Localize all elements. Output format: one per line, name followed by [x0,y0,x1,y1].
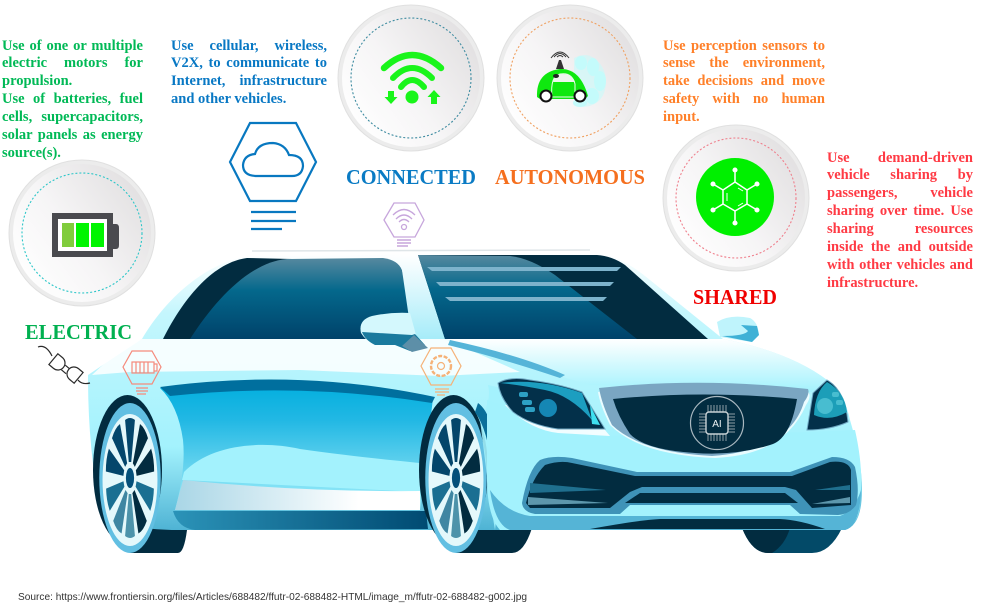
icon: wifi signal [384,55,441,104]
bumper dark strip [590,519,825,529]
heading: shared: SHARED [693,285,777,309]
icon: shared disc [663,125,809,271]
grille [598,383,810,458]
text block: electric description: cells, supercapacitors, [2,109,143,125]
side mirror [360,313,428,352]
right side mirror [717,317,759,342]
text block: connected description: V2X, to communicate to [171,55,327,71]
text block: autonomous description: take decisions and move [663,73,825,89]
icon: small wifi hexagon [384,203,424,246]
text block: electric description: electric motors for [2,55,143,71]
text block: shared description: passengers, vehicle [827,185,973,201]
windshield glass highlight [418,255,637,339]
rear wheel arch [93,395,162,545]
text block: electric description: source(s). [2,145,61,161]
AI chip emblem [690,396,744,450]
heading: connected: CONNECTED [346,165,476,189]
windshield [418,255,708,339]
icon: autonomous disc [497,5,643,151]
door lower wave [182,445,420,492]
text block: autonomous description: input. [663,109,700,125]
text block: autonomous description: Use perception sensors to [663,38,825,54]
windshield stripes [427,267,621,301]
text block: shared description: infrastructure. [827,275,918,291]
text block: connected description [171,38,327,107]
text block: autonomous description [663,38,825,125]
A pillar [383,255,446,339]
bumper lower shade [490,490,861,530]
text block: shared description: inside the and outside [827,239,973,255]
door crease [160,379,435,403]
door sill [173,511,428,530]
text block: autonomous description: safety with no human [663,91,825,107]
text block: electric description: Use of batteries, fuel [2,91,143,107]
icon: brain [573,55,606,107]
text block: connected description: and other vehicles. [171,91,286,107]
left headlight [498,379,610,436]
text block: autonomous description: sense the environment, [663,55,825,71]
door reflection [175,480,420,510]
door panel [160,382,433,510]
icon: plug and cable [38,346,90,384]
text block: shared description [827,150,973,291]
text block: electric description [2,38,143,161]
icon: small gear hexagon [421,348,461,395]
text block: shared description: vehicle sharing by [827,167,973,183]
hood panel [445,339,827,392]
front wheel arch [419,395,488,545]
icon: molecule network [711,168,759,225]
text block: shared description: sharing resources [827,221,973,237]
text block: shared description: with other vehicles and [827,257,973,273]
icon: electric disc [9,160,155,306]
upper body band [92,339,520,376]
rear tire [130,470,200,553]
icon: battery [52,213,119,257]
lower air intake [522,457,858,515]
text block: electric description: solar panels as energy [2,127,143,143]
roof line [252,250,590,251]
heading: electric: ELECTRIC [25,320,132,344]
side window glass [190,258,411,339]
text block: connected description: Use cellular, wireless, [171,38,327,54]
fender crease [475,403,498,470]
side window frame [163,258,292,339]
text block: electric description: propulsion. [2,73,72,89]
car illustration [88,250,862,553]
dark tire inner [742,528,790,553]
front fender between wheel and nose [480,385,600,530]
icon: small battery hexagon [123,351,161,394]
icon: self-driving car [537,52,588,102]
car body [88,253,862,530]
front tire left [456,470,540,553]
front tire right [742,528,842,553]
right headlight [807,380,848,430]
text block: shared description: sharing over time. Use [827,203,973,219]
text block: electric description: Use of one or multiple [2,38,143,54]
A pillar highlight to fender [448,340,565,378]
icon: cloud hexagon [230,123,316,229]
text block: shared description: Use demand-driven [827,150,973,166]
text block: connected description: Internet, infrastructure [171,73,327,89]
front wheel [425,403,487,553]
rear wheel [99,403,161,553]
AI chip emblem: AI [712,419,722,430]
source line: Source: https://www.frontiersin.org/files/Articles/688482/ffutr-02-688482-HTML/image_m/ffutr-02-688482-g002.jpg [18,592,527,603]
heading: autonomous: AUTONOMOUS [495,165,645,189]
icon: connected disc [338,5,484,151]
front bumper [487,400,861,530]
